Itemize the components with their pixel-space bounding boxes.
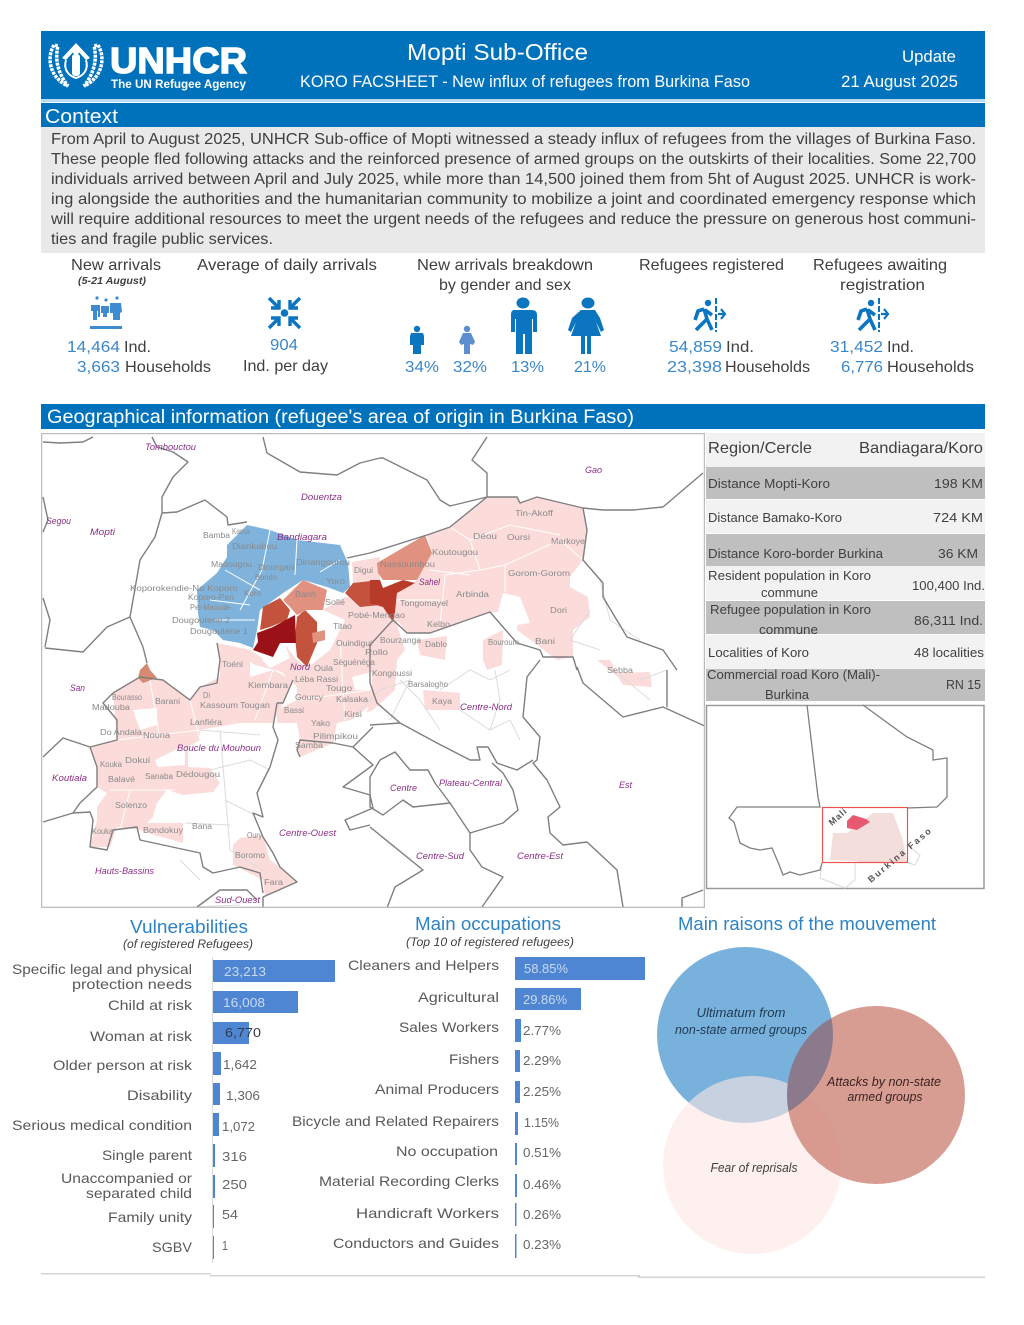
table row: resident population: Resident population in Koro xyxy=(708,568,871,583)
chart heading: main reasons: Main raisons of the mouvement xyxy=(678,914,936,934)
stat: new arrivals xyxy=(67,257,211,376)
stat: refugees registered: Households xyxy=(725,359,810,376)
header banner xyxy=(41,31,985,102)
venn label: ultimatum: Ultimatum from xyxy=(696,1006,786,1020)
map labels: communes: Bondo xyxy=(255,573,278,582)
map labels: regions: Centre-Nord xyxy=(460,702,513,712)
map labels: communes: Koutougou xyxy=(432,548,478,557)
map labels: communes: Koporokendie-Na Koporo xyxy=(130,584,239,593)
icon: UNHCR logo emblem xyxy=(50,43,102,86)
icon: woman xyxy=(568,298,604,354)
map labels: communes: Boromo xyxy=(235,851,266,860)
inset label: Burkina Faso: Burkina Faso xyxy=(866,825,934,885)
map labels: regions xyxy=(46,442,632,905)
context text block: ties and fragile public services. xyxy=(51,231,273,248)
map labels: regions: Tombouctou xyxy=(145,442,196,452)
map labels: communes: Koporo-Pen xyxy=(188,593,234,602)
vulnerability values: 16,008 xyxy=(223,995,265,1010)
chart heading: main occupations: Main occupations xyxy=(415,914,561,934)
vulnerability category labels: Woman at risk xyxy=(90,1028,193,1044)
map labels: communes: Dougoutene 2 xyxy=(172,616,231,625)
map labels: communes: Banh xyxy=(295,590,316,599)
vulnerability values: 1,642 xyxy=(223,1057,257,1072)
stat: refugees registered: Ind. xyxy=(726,339,754,356)
map labels: communes: Arbinda xyxy=(456,590,490,599)
map labels: communes: Ouindigui xyxy=(336,639,372,648)
context text block: individuals arrived between April and July 2025, while more than 14,500 joined them from 5ht of August 2025. UNHCR is work- xyxy=(51,171,976,188)
occupation category labels: Conductors and Guides xyxy=(333,1235,499,1251)
vulnerability category labels: Serious medical condition xyxy=(12,1117,192,1133)
map labels: communes: Rollo xyxy=(365,648,389,657)
map labels: communes: Dougoutene 1 xyxy=(190,627,249,636)
map labels: communes: Dinangourou xyxy=(296,558,350,567)
map labels: communes: Pobé-Mengao xyxy=(348,611,406,620)
map labels: communes: Tougo xyxy=(326,684,353,693)
map labels: regions: Plateau-Central xyxy=(439,778,503,788)
chart: vulnerabilities xyxy=(12,917,335,1263)
map labels: communes: Kassa xyxy=(232,527,250,536)
venn label: ultimatum xyxy=(675,1006,807,1037)
venn diagram: main reasons of the movement xyxy=(657,914,965,1254)
map labels: communes: Bondokuy xyxy=(143,826,183,835)
map labels: communes: Dablo xyxy=(425,640,448,649)
stat: average of daily arrivals: Average of daily arrivals xyxy=(197,257,377,274)
stat: refugees registered: 54,859 xyxy=(669,339,722,356)
map labels: communes: Do Andala xyxy=(100,728,143,737)
logo wordmark: UNHCR xyxy=(110,40,247,81)
map labels: regions: Boucle du Mouhoun xyxy=(177,743,261,753)
map labels: communes: Diankabou xyxy=(232,542,277,551)
map labels: communes xyxy=(92,509,634,887)
map labels: regions: Est xyxy=(619,780,632,790)
table row: resident population: 100,400 Ind. xyxy=(912,578,985,593)
icon: person walking through door xyxy=(695,298,725,332)
stat: average of daily arrivals: 904 xyxy=(270,337,298,354)
map labels: communes: Fara xyxy=(264,878,284,887)
vulnerability category labels: Family unity xyxy=(108,1209,192,1225)
occupation values: 0.23% xyxy=(523,1237,561,1252)
occupation values: 0.46% xyxy=(523,1177,561,1192)
map labels: communes: Toéni xyxy=(222,660,243,669)
map labels: communes: Balavé xyxy=(108,775,136,784)
heading: geographical information: Geographical information (refugee's area of origin in Burkina Faso) xyxy=(47,407,634,428)
map labels: regions: Nord xyxy=(290,662,311,672)
vulnerability values: 54 xyxy=(222,1207,238,1222)
table row: region/cercle xyxy=(706,433,985,467)
chart subheading: vulnerabilities: (of registered Refugees) xyxy=(123,937,253,951)
map labels: communes: Dori xyxy=(550,606,567,615)
table row: localities xyxy=(706,635,985,669)
map labels: communes: Sanaba xyxy=(145,772,174,781)
venn label: fear of reprisals: Fear of reprisals xyxy=(710,1161,798,1175)
map labels: communes: Yako xyxy=(311,719,331,728)
venn circle: ultimatum xyxy=(657,947,833,1123)
stat: new arrivals: 14,464 xyxy=(67,339,120,356)
map labels: communes: Kiembara xyxy=(248,681,289,690)
table row: region/cercle: Bandiagara/Koro xyxy=(859,440,983,457)
map labels: regions: Douentza xyxy=(301,492,342,502)
inset label: Mali: Mali xyxy=(827,806,849,827)
stat: refugees awaiting registration: registration xyxy=(840,277,925,294)
occupation category labels: Fishers xyxy=(449,1051,499,1067)
venn circle: attacks xyxy=(787,1006,965,1184)
occupation values: 58.85% xyxy=(524,961,568,976)
table row: commercial road xyxy=(706,667,985,702)
stat: refugees awaiting registration xyxy=(813,257,974,376)
venn label: attacks: armed groups xyxy=(848,1090,922,1104)
table row: refugee population: Refugee population in Koro xyxy=(710,602,871,617)
map labels: communes: Tin-Akoff xyxy=(515,509,554,518)
stat: breakdown by gender and sex: 13% xyxy=(511,359,544,376)
map labels: communes: Kalsaka xyxy=(336,695,369,704)
occupation values: 2.29% xyxy=(523,1053,561,1068)
occupation values: 2.25% xyxy=(523,1084,561,1099)
vulnerability values: 23,213 xyxy=(224,964,266,979)
stat: breakdown by gender and sex: 21% xyxy=(574,359,606,376)
map labels: communes: Dédougou xyxy=(176,770,220,779)
occupation values: 0.26% xyxy=(523,1207,561,1222)
venn circle: fear of reprisals xyxy=(663,1076,841,1254)
map labels: regions: Sahel xyxy=(419,577,441,587)
map region boundaries xyxy=(43,437,707,908)
inset: Mali outline xyxy=(729,705,947,875)
map labels: regions: Centre-Est xyxy=(517,851,564,861)
table row: localities: Localities of Koro xyxy=(708,645,809,660)
map labels: communes: Titao xyxy=(333,622,353,631)
map labels: regions: Centre-Ouest xyxy=(279,828,337,838)
stat: breakdown by gender and sex: 34% xyxy=(405,359,439,376)
table row: commercial road: RN 15 xyxy=(946,677,981,692)
occupation category labels: Material Recording Clerks xyxy=(319,1173,499,1189)
stat: refugees awaiting registration: Refugees awaiting xyxy=(813,257,947,274)
update date: 21 August 2025 xyxy=(841,73,958,91)
table row: distance Koro-border Burkina: Distance Koro-border Burkina xyxy=(708,546,884,561)
footer lines xyxy=(41,1273,985,1278)
map labels: communes: Dokui xyxy=(125,756,150,765)
map commune boundaries xyxy=(110,525,583,830)
map labels: regions: Bandiagara xyxy=(277,532,327,542)
context text block: will require additional resources to meet the urgent needs of the refugees and reduce the pressure on generous host communi- xyxy=(50,211,976,228)
map labels: regions: Segou xyxy=(46,516,71,526)
map labels: communes: Markoye xyxy=(551,537,586,546)
map labels: communes: Bana xyxy=(192,822,213,831)
map labels: communes: Kelbo xyxy=(427,620,451,629)
stat: refugees registered: Refugees registered xyxy=(639,257,784,274)
map labels: communes: Barsalogho xyxy=(408,680,449,689)
map labels: communes: Sollé xyxy=(325,598,346,607)
map labels: communes: Tongomayel xyxy=(400,599,448,608)
occupation category labels: Animal Producers xyxy=(375,1081,499,1097)
map labels: communes: Kouka xyxy=(100,760,123,769)
map: area of origin in Burkina Faso xyxy=(41,433,707,908)
vulnerability category labels: Single parent xyxy=(102,1147,192,1163)
stat: new arrivals: Ind. xyxy=(124,339,151,356)
stat: average of daily arrivals xyxy=(197,257,377,375)
update date xyxy=(841,48,958,91)
map labels: communes: Bourzanga xyxy=(380,636,422,645)
venn label: attacks: Attacks by non-state xyxy=(826,1075,941,1089)
map labels: communes: Koro xyxy=(244,589,262,598)
map labels: communes: Gourcy xyxy=(295,693,323,702)
map choropleth: high-origin communes in red xyxy=(138,535,432,683)
occupation bars xyxy=(515,957,645,1258)
stat: refugees awaiting registration: Households xyxy=(887,359,974,376)
inset: extent rectangle xyxy=(822,808,908,862)
icon: group of people xyxy=(90,296,122,329)
map labels: communes: Séguénéga xyxy=(333,658,376,667)
map labels: communes: Madougou xyxy=(211,560,252,569)
table row: distance Bamako-Koro: Distance Bamako-Koro xyxy=(708,510,842,525)
stat: breakdown by gender and sex: 32% xyxy=(453,359,487,376)
map labels: regions: Centre-Sud xyxy=(416,851,465,861)
icon: person walking through door xyxy=(858,298,888,332)
map choropleth: white gaps xyxy=(133,595,530,767)
heading: Context xyxy=(41,103,985,128)
stat: refugees awaiting registration: 6,776 xyxy=(841,359,883,376)
vulnerability values: 1,306 xyxy=(226,1088,260,1103)
vulnerability values: 6,770 xyxy=(225,1025,261,1040)
context text block: These people fled following attacks and the reinforced presence of armed groups on the outskirts of their localities. Some 22,700 xyxy=(51,151,976,168)
logo tagline: The UN Refugee Agency xyxy=(111,77,246,91)
map labels: communes: Bamba xyxy=(203,531,231,540)
vulnerability values: 1 xyxy=(222,1238,228,1253)
vulnerability values: 316 xyxy=(222,1149,247,1164)
map labels: communes: Sebba xyxy=(607,666,634,675)
table row: commercial road: Commercial road Koro (Mali)- xyxy=(707,667,880,682)
table row: refugee population xyxy=(706,601,985,637)
venn label: attacks xyxy=(826,1075,941,1104)
table row: distance Koro-border Burkina xyxy=(706,534,985,566)
vulnerability category labels: Older person at risk xyxy=(53,1057,193,1073)
table row: distance Bamako-Koro: 724 KM xyxy=(933,510,983,525)
icon: girl xyxy=(459,326,475,354)
map labels: communes: Yoro xyxy=(326,577,346,586)
vulnerability values: 250 xyxy=(222,1177,247,1192)
table row: refugee population: 86,311 Ind. xyxy=(914,613,983,628)
map labels: regions: Mopti xyxy=(90,527,116,537)
stat: breakdown by gender and sex xyxy=(405,257,606,376)
map labels: communes: Di xyxy=(203,691,210,700)
map labels: communes: Kirsi xyxy=(344,710,362,719)
vulnerability category labels: protection needs xyxy=(72,976,192,992)
occupation category labels: Sales Workers xyxy=(399,1019,499,1035)
occupation category labels: No occupation xyxy=(396,1143,498,1159)
vulnerability category labels: Disability xyxy=(127,1087,192,1103)
map labels: regions: Gao xyxy=(585,465,602,475)
map labels: communes: Barani xyxy=(155,697,180,706)
map labels: communes: Pel-Maoude xyxy=(190,603,231,612)
stat: breakdown by gender and sex: New arrivals breakdown xyxy=(417,257,593,274)
key facts table xyxy=(706,433,985,702)
stat: new arrivals: New arrivals xyxy=(71,257,161,274)
table row: resident population: commune xyxy=(761,585,818,600)
chart heading: vulnerabilities: Vulnerabilities xyxy=(130,917,248,937)
map labels: communes: Pilimpikou xyxy=(313,732,358,741)
stat: refugees awaiting registration: Ind. xyxy=(887,339,914,356)
occupation category labels xyxy=(292,957,499,1251)
icon: boy xyxy=(410,326,424,354)
map labels: communes: Nassoumbou xyxy=(380,560,435,569)
stat: new arrivals: (5-21 August) xyxy=(78,276,147,287)
inset: Burkina Faso shaded area xyxy=(820,813,920,888)
vulnerability bars xyxy=(213,960,335,1259)
map labels: communes: Léba Rassi xyxy=(295,675,338,684)
map labels: communes: Kassoum xyxy=(200,701,238,710)
map labels: communes: Samba xyxy=(295,741,324,750)
table row: resident population xyxy=(706,566,985,600)
vulnerability category labels xyxy=(12,961,193,1255)
context text block: From April to August 2025, UNHCR Sub-office of Mopti witnessed a steady influx of refugees from the villages of Burkina Faso. xyxy=(51,131,976,148)
chart subheading: main occupations: (Top 10 of registered refugees) xyxy=(406,935,574,949)
heading: Context: Context xyxy=(45,106,118,128)
map labels: communes: Bani xyxy=(535,637,555,646)
vulnerability category labels: Specific legal and physical xyxy=(12,961,192,977)
occupation values: 29.86% xyxy=(523,992,567,1007)
map labels: communes: Bassi xyxy=(284,706,304,715)
map labels: regions: Hauts-Bassins xyxy=(95,866,154,876)
map labels: communes: Lanfiéra xyxy=(190,718,223,727)
map labels: communes: Kouka xyxy=(92,827,114,836)
map labels: regions: San xyxy=(70,683,85,693)
table row: distance Mopti-Koro: 198 KM xyxy=(934,476,983,491)
map labels: communes: Digui xyxy=(354,566,373,575)
table row: localities: 48 localities xyxy=(914,645,985,660)
occupation category labels: Bicycle and Related Repairers xyxy=(292,1113,499,1129)
icon: man xyxy=(511,298,537,354)
occupation category labels: Cleaners and Helpers xyxy=(348,957,499,973)
map labels: communes: Oursi xyxy=(507,533,530,542)
map choropleth: Bandiagara cercle in blue xyxy=(197,525,350,648)
map labels: communes: Oula xyxy=(314,664,334,673)
vulnerability category labels: separated child xyxy=(86,1185,192,1201)
map labels: communes: Déou xyxy=(473,532,497,541)
icon: converging arrows xyxy=(269,298,300,328)
occupation values: 0.51% xyxy=(523,1145,561,1160)
map labels: regions: Koutiala xyxy=(52,773,87,783)
vulnerability category labels: Child at risk xyxy=(108,997,193,1013)
table row: distance Mopti-Koro xyxy=(706,467,985,499)
chart: main occupations xyxy=(292,914,645,1258)
map labels: communes: Bouroum xyxy=(488,638,519,647)
stat: refugees registered xyxy=(639,257,810,376)
map labels: regions: Centre xyxy=(390,783,417,793)
table row: commercial road: Burkina xyxy=(765,687,810,702)
vulnerability category labels: SGBV xyxy=(152,1239,193,1255)
map labels: communes: Gorom-Gorom xyxy=(508,569,570,578)
vulnerability category labels: Unaccompanied or xyxy=(61,1170,192,1186)
stat: average of daily arrivals: Ind. per day xyxy=(243,358,328,375)
occupation category labels: Agricultural xyxy=(418,989,499,1005)
map labels: communes: Bourasso xyxy=(112,693,142,702)
table row: refugee population: commune xyxy=(759,622,818,637)
map labels: communes: Oury xyxy=(247,831,262,840)
table row: distance Bamako-Koro xyxy=(706,500,985,533)
occupation values xyxy=(523,961,568,1252)
stat: new arrivals: Households xyxy=(125,359,211,376)
map labels: communes: Kaya xyxy=(432,697,453,706)
title: Mopti Sub-Office xyxy=(407,39,588,65)
table row: region/cercle: Region/Cercle xyxy=(708,440,812,457)
map labels: regions: Sud-Ouest xyxy=(215,895,261,905)
inset locator map xyxy=(706,705,984,888)
heading: geographical information xyxy=(41,404,985,429)
occupation category labels: Handicraft Workers xyxy=(356,1205,499,1221)
context text block: ing alongside the authorities and the humanitarian community to mobilize a joint and coordinated emergency response which xyxy=(51,191,976,208)
map labels: communes: Nouna xyxy=(143,731,171,740)
map labels: communes: Kongoussi xyxy=(372,669,412,678)
map labels: communes: Solenzo xyxy=(115,801,148,810)
occupation values: 1.15% xyxy=(524,1115,559,1130)
table row: distance Koro-border Burkina: 36 KM xyxy=(938,546,978,561)
vulnerability values: 1,072 xyxy=(222,1119,255,1134)
update date: Update xyxy=(902,48,956,66)
map labels: communes: Dioungani xyxy=(258,563,295,572)
map labels: communes: Tougan xyxy=(240,701,270,710)
table row: distance Mopti-Koro: Distance Mopti-Koro xyxy=(708,476,830,491)
venn overlap: ultimatum and attacks xyxy=(787,1018,833,1112)
stat: refugees registered: 23,398 xyxy=(667,359,722,376)
map labels: communes: Madouba xyxy=(92,703,131,712)
occupation values: 2.77% xyxy=(523,1023,561,1038)
context text block xyxy=(41,127,985,253)
subtitle: KORO FACSHEET - New influx of refugees from Burkina Faso xyxy=(300,73,750,91)
stat: new arrivals: 3,663 xyxy=(77,359,120,376)
map choropleth: light pink communes xyxy=(90,497,652,897)
stat: breakdown by gender and sex: by gender and sex xyxy=(439,277,571,294)
venn label: ultimatum: non-state armed groups xyxy=(675,1023,807,1037)
vulnerability values xyxy=(222,964,266,1253)
stat: refugees awaiting registration: 31,452 xyxy=(830,339,883,356)
